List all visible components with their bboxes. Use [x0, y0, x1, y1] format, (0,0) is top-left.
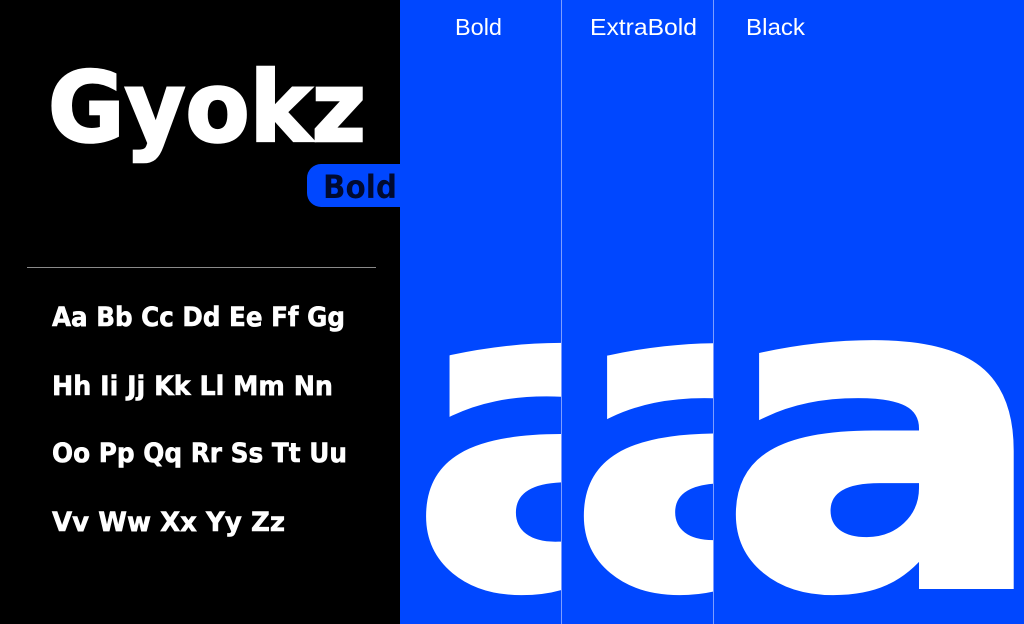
alphabet specimen	[52, 302, 347, 538]
column: Bold	[426, 18, 561, 596]
divider rule	[27, 267, 376, 268]
column: Black	[736, 18, 1014, 596]
title: Gyokz: Gyokz	[48, 51, 366, 164]
weight tag: Bold: Bold	[323, 168, 397, 206]
panel: black specimen	[0, 0, 400, 624]
alphabet line 3: Oo Pp Qq Rr Ss Tt Uu	[52, 438, 347, 469]
label: ExtraBold: ExtraBold	[590, 14, 697, 40]
label: Black: Black	[746, 14, 806, 40]
column divider 2	[713, 0, 714, 624]
alphabet line 2: Hh Ii Jj Kk Ll Mm Nn	[52, 371, 333, 402]
alphabet line 4: Vv Ww Xx Yy Zz	[52, 507, 285, 538]
column divider 1	[561, 0, 562, 624]
label: Bold: Bold	[455, 14, 502, 40]
alphabet line 1: Aa Bb Cc Dd Ee Ff Gg	[52, 302, 345, 333]
panel: blue weights	[400, 0, 1024, 624]
column: ExtraBold	[584, 18, 713, 596]
